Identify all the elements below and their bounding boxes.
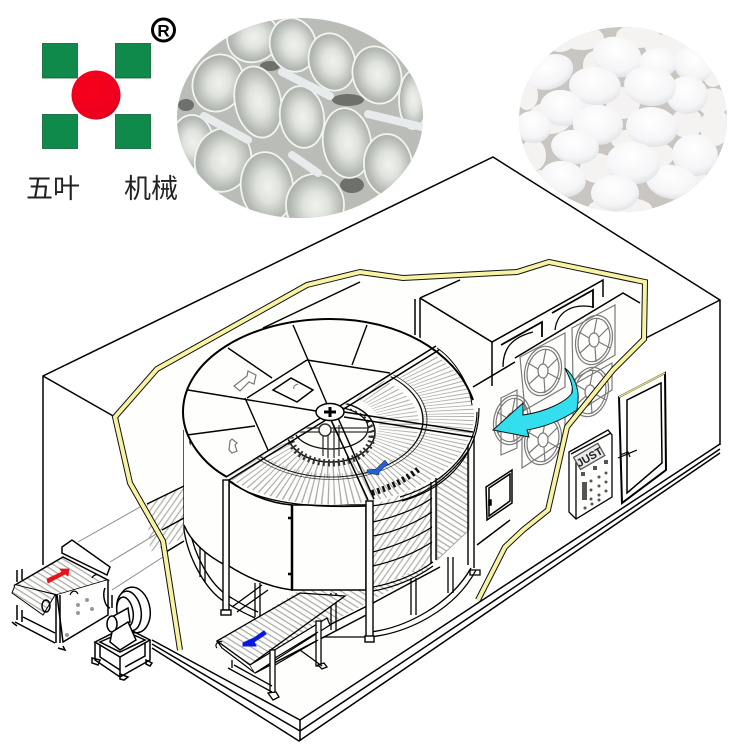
outfeed legs	[228, 621, 327, 700]
logo red circle	[72, 70, 120, 120]
carousel frame ring and legs	[184, 430, 480, 637]
drive motor	[92, 585, 154, 680]
access panel	[486, 470, 512, 520]
red arrow	[47, 569, 69, 583]
room outer outline	[43, 157, 720, 565]
control cabinet: JUST	[575, 445, 605, 470]
freezer room line drawing	[12, 157, 720, 741]
evaporator box	[400, 280, 640, 386]
company name: 五叶	[26, 174, 80, 204]
outbound conveyor under carousel	[217, 530, 440, 673]
feeder machine	[12, 540, 110, 650]
floor base edges	[152, 444, 720, 741]
inner floor line	[473, 362, 515, 545]
carousel beams	[226, 346, 473, 500]
blue arrow on carousel	[367, 460, 388, 475]
carousel cover panels	[183, 319, 479, 507]
cyan airflow arrow	[493, 368, 578, 437]
carousel wall panels	[184, 428, 366, 590]
spiral conveyor side stripes	[373, 436, 474, 591]
back wall lines	[263, 282, 360, 328]
central hub	[316, 404, 344, 420]
yellow insulation line	[115, 262, 645, 650]
photo: glutinous rice balls	[519, 27, 727, 212]
outfeed conveyor	[216, 593, 345, 700]
feed lines to machine	[78, 507, 163, 590]
logo squares	[42, 44, 150, 148]
control cabinet	[569, 430, 612, 519]
door	[618, 373, 666, 503]
open carousel conveyor	[227, 354, 474, 505]
evaporator fans	[488, 305, 618, 469]
company name: 机械	[124, 174, 178, 204]
registered mark: R	[157, 22, 170, 40]
rear conveyor	[147, 486, 184, 552]
room interior floor	[115, 262, 645, 720]
photo: dumplings	[177, 18, 423, 218]
logo	[26, 19, 178, 204]
carousel front posts	[221, 480, 374, 642]
registered mark	[152, 19, 174, 41]
blue arrow	[243, 631, 266, 646]
